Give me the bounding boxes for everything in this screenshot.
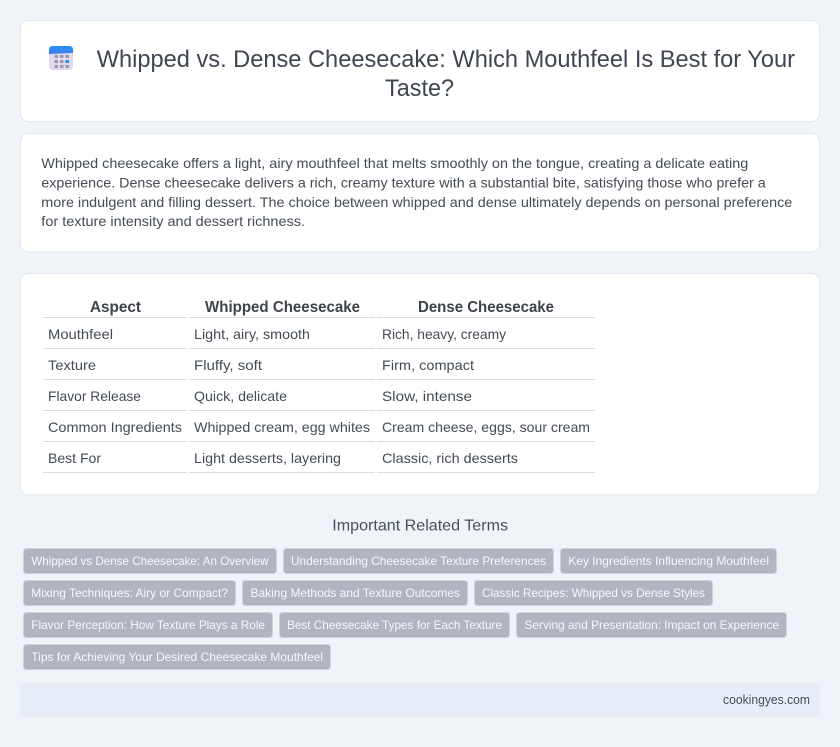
table header: Whipped Cheesecake: [205, 299, 360, 316]
tag: best types: Best Cheesecake Types for Each Texture: [287, 618, 502, 632]
tag: texture preferences: Understanding Cheesecake Texture Preferences: [291, 554, 546, 568]
table row: common ingredients: Whipped cream, egg whites: [194, 419, 370, 435]
table row: common ingredients: Cream cheese, eggs, sour cream: [382, 419, 590, 435]
text block: summary: [41, 155, 793, 229]
table header: Dense Cheesecake: [418, 299, 554, 316]
text block: summary: for texture intensity and dessert richness.: [41, 213, 305, 229]
tag: baking methods: [242, 580, 468, 606]
table row: mouthfeel: Light, airy, smooth: [194, 326, 310, 342]
table row: texture: Firm, compact: [382, 357, 474, 373]
tag: best types: [280, 612, 510, 638]
table row: texture: Fluffy, soft: [194, 357, 262, 373]
table row: texture: Texture: [48, 357, 96, 373]
icon: calendar: [49, 46, 73, 70]
panel: related terms: [24, 518, 786, 670]
tag: tips: [24, 644, 330, 670]
table row: mouthfeel: Rich, heavy, creamy: [382, 326, 506, 342]
table row: best for: Best For: [48, 450, 101, 466]
table row: flavor release: Slow, intense: [382, 388, 472, 404]
tag: baking methods: Baking Methods and Texture Outcomes: [250, 586, 460, 600]
tag: overview: Whipped vs Dense Cheesecake: An Overview: [31, 554, 269, 568]
tag: overview: [24, 548, 276, 574]
title: [97, 46, 795, 102]
table row: common ingredients: [48, 419, 590, 435]
tag: key ingredients: [560, 548, 776, 574]
table row: best for: Classic, rich desserts: [382, 450, 518, 466]
table row: flavor release: Flavor Release: [48, 388, 141, 404]
heading: related terms: Important Related Terms: [332, 518, 508, 534]
text block: summary: experience. Dense cheesecake delivers a rich, creamy texture with a substantial bite, satisfying those who prefer a: [41, 174, 766, 190]
tag: mixing techniques: Mixing Techniques: Airy or Compact?: [31, 586, 228, 600]
table row: best for: [48, 450, 518, 466]
tag: classic recipes: Classic Recipes: Whipped vs Dense Styles: [482, 586, 705, 600]
panel: header: [20, 20, 820, 122]
tag: flavor perception: [24, 612, 272, 638]
footer: [20, 683, 820, 717]
text block: summary: Whipped cheesecake offers a light, airy mouthfeel that melts smoothly on the tongue, creating a delicate eating: [41, 155, 748, 171]
table row: texture: [48, 357, 474, 373]
footer: cookingyes.com: [723, 693, 810, 707]
tag: tips: Tips for Achieving Your Desired Cheesecake Mouthfeel: [31, 650, 323, 664]
panel: summary paragraph: [20, 134, 820, 252]
tag: classic recipes: [474, 580, 712, 606]
tag: key ingredients: Key Ingredients Influencing Mouthfeel: [568, 554, 769, 568]
panel: comparison table: [20, 274, 820, 495]
table header: [90, 299, 554, 316]
table row: mouthfeel: [48, 326, 506, 342]
tag: mixing techniques: [24, 580, 236, 606]
table row: best for: Light desserts, layering: [194, 450, 341, 466]
table row: mouthfeel: Mouthfeel: [48, 326, 113, 342]
tag: serving and presentation: [516, 612, 786, 638]
title: Whipped vs. Dense Cheesecake: Which Mouthfeel Is Best for Your: [97, 46, 795, 73]
title: Taste?: [385, 75, 454, 102]
table row: flavor release: [48, 388, 472, 404]
tag: texture preferences: [284, 548, 554, 574]
table row: common ingredients: Common Ingredients: [48, 419, 182, 435]
tag: serving and presentation: Serving and Presentation: Impact on Experience: [524, 618, 779, 632]
tag: flavor perception: Flavor Perception: How Texture Plays a Role: [31, 618, 265, 632]
table header: Aspect: [90, 299, 142, 316]
text block: summary: more indulgent and filling dessert. The choice between whipped and dense ultimately depends on personal preference: [41, 194, 793, 210]
table row: flavor release: Quick, delicate: [194, 388, 287, 404]
